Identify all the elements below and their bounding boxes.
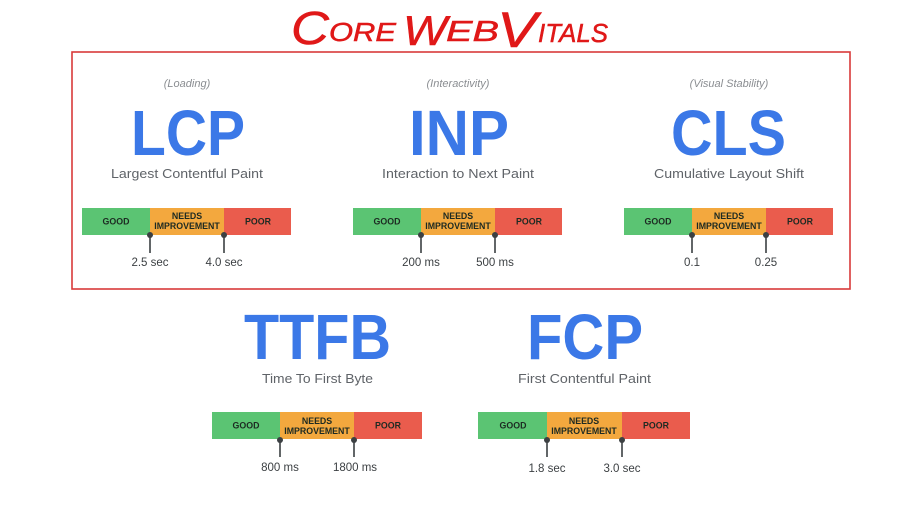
title: V (497, 2, 543, 58)
subtitle: time to first byte: Time To First Byte (262, 371, 373, 386)
heading: LCP: LCP (131, 97, 245, 169)
threshold bar: TTFB: NEEDS (302, 416, 332, 426)
threshold bar: FCP: 3.0 sec (603, 463, 641, 475)
metric: INP (353, 78, 562, 269)
threshold bar: INP (353, 208, 562, 269)
title: ITALS (538, 18, 609, 48)
subtitle: interaction to next paint: Interaction to Next Paint (382, 166, 534, 181)
metric: FCP (478, 301, 690, 475)
panel: core web vitals frame (72, 52, 850, 289)
threshold bar: LCP (82, 208, 291, 269)
threshold bar: CLS: 0.25 (755, 257, 777, 269)
threshold bar: LCP: IMPROVEMENT (154, 221, 220, 231)
threshold bar: INP: 500 ms (476, 257, 514, 269)
threshold bar: TTFB: IMPROVEMENT (284, 426, 350, 436)
metric: TTFB (212, 301, 422, 474)
threshold bar: FCP: 1.8 sec (528, 463, 566, 475)
threshold bar: INP: 200 ms (402, 257, 440, 269)
threshold bar: FCP: GOOD (500, 420, 526, 430)
threshold bar: FCP: POOR (643, 420, 670, 430)
threshold bar: TTFB: 800 ms (261, 462, 299, 474)
metric: LCP (82, 78, 291, 269)
threshold bar: INP: GOOD (374, 216, 400, 226)
heading: TTFB: TTFB (244, 301, 391, 373)
threshold bar: TTFB (212, 412, 422, 474)
title: EB (446, 16, 499, 48)
threshold bar: INP: POOR (516, 216, 543, 226)
category: visual stability: (Visual Stability) (690, 78, 769, 90)
metric: CLS (624, 78, 833, 269)
threshold bar: FCP (478, 412, 690, 475)
title: W (403, 7, 451, 54)
threshold bar: CLS: 0.1 (684, 257, 700, 269)
threshold bar: CLS: POOR (787, 216, 814, 226)
threshold bar: CLS: IMPROVEMENT (696, 221, 762, 231)
subtitle: largest contentful paint: Largest Contentful Paint (111, 166, 263, 181)
category: loading: (Loading) (164, 78, 211, 90)
subtitle: cumulative layout shift: Cumulative Layout Shift (654, 166, 804, 181)
heading: INP: INP (409, 97, 509, 169)
threshold bar: LCP: NEEDS (172, 211, 202, 221)
title: ORE (329, 17, 397, 47)
heading: CLS: CLS (671, 97, 786, 169)
threshold bar: TTFB: POOR (375, 420, 402, 430)
threshold bar: CLS (624, 208, 833, 269)
threshold bar: LCP: 2.5 sec (131, 257, 169, 269)
threshold bar: TTFB: 1800 ms (333, 462, 377, 474)
title (291, 2, 609, 58)
subtitle: first contentful paint: First Contentful Paint (518, 371, 651, 386)
heading: FCP: FCP (527, 301, 643, 373)
threshold bar: INP: IMPROVEMENT (425, 221, 491, 231)
threshold bar: TTFB: GOOD (233, 420, 259, 430)
threshold bar: INP: NEEDS (443, 211, 473, 221)
threshold bar: LCP: POOR (245, 216, 272, 226)
title: C (291, 2, 330, 54)
category: interactivity: (Interactivity) (427, 78, 490, 90)
threshold bar: FCP: NEEDS (569, 416, 599, 426)
threshold bar: CLS: GOOD (645, 216, 671, 226)
threshold bar: FCP: IMPROVEMENT (551, 426, 617, 436)
threshold bar: LCP: GOOD (103, 216, 129, 226)
threshold bar: CLS: NEEDS (714, 211, 744, 221)
threshold bar: LCP: 4.0 sec (205, 257, 243, 269)
